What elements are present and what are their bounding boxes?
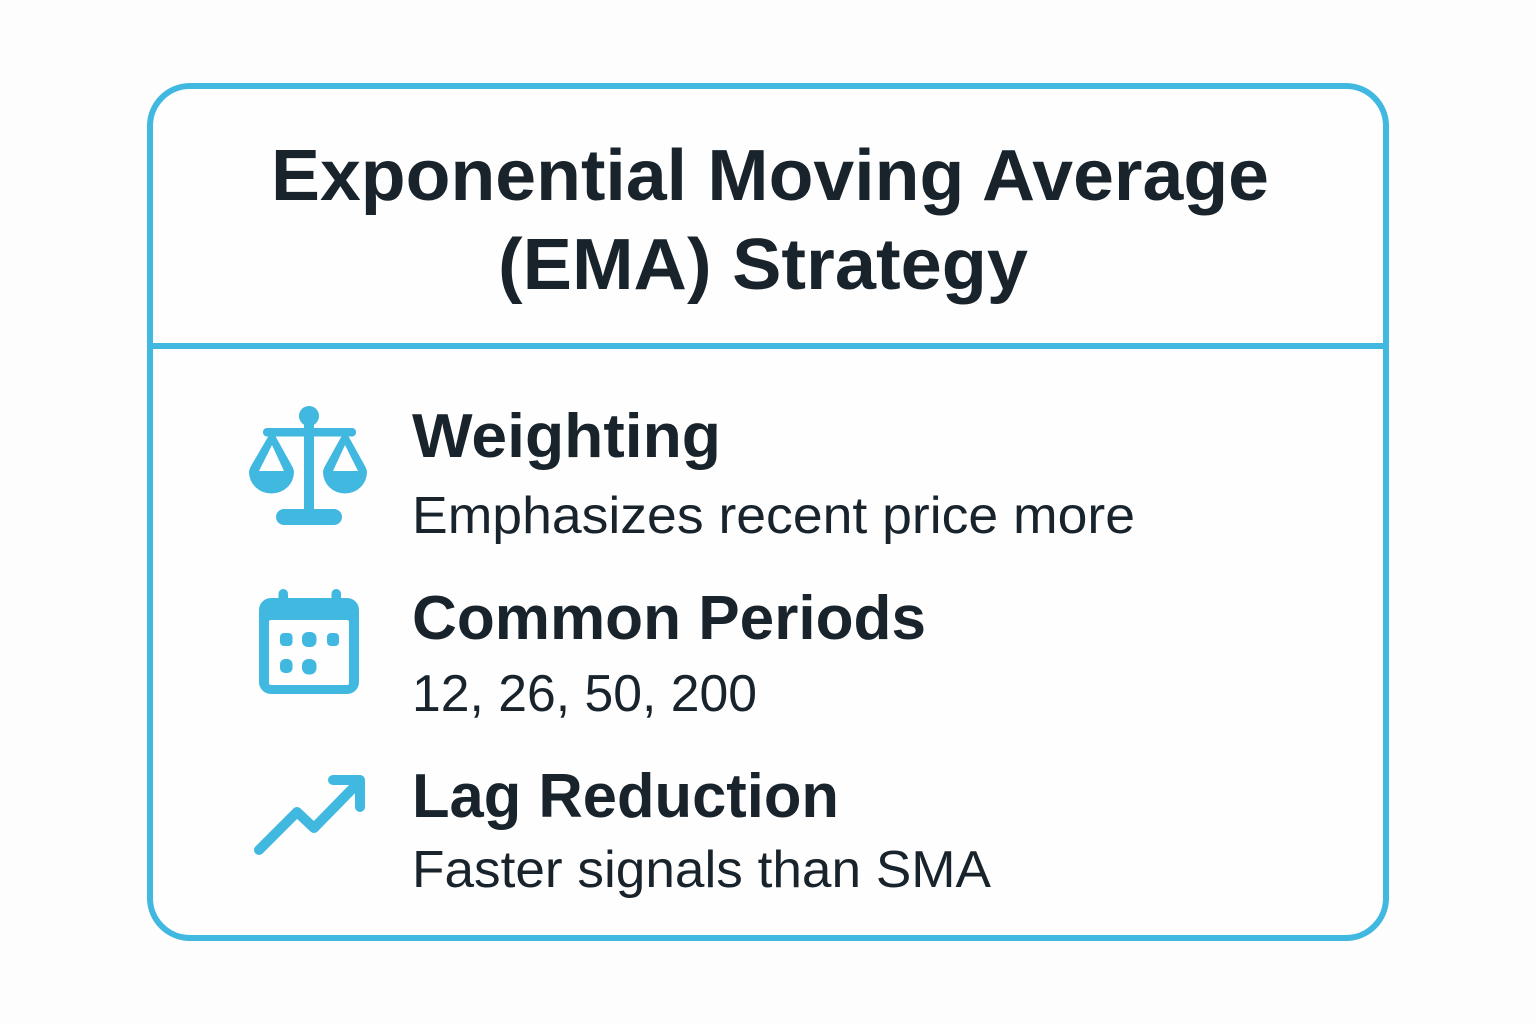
text: common periods values: 12, 26, 50, 200 [412,665,757,723]
text: lag reduction description: Faster signals than SMA [412,841,991,899]
title [271,136,1269,305]
icon: rising trend arrow [259,780,360,850]
text: weighting description: Emphasizes recent price more [412,487,1135,545]
item: lag reduction [259,762,991,899]
heading: lag reduction: Lag Reduction [412,762,839,831]
icon: calendar [259,589,359,694]
title: Exponential Moving Average [271,136,1269,216]
heading: common periods: Common Periods [412,584,926,653]
item: weighting [249,402,1135,545]
title: (EMA) Strategy [498,225,1028,305]
heading: weighting: Weighting [412,402,721,471]
item: common periods [259,584,926,723]
panel: EMA strategy card [150,86,1386,938]
icon: balance scale [249,406,367,525]
